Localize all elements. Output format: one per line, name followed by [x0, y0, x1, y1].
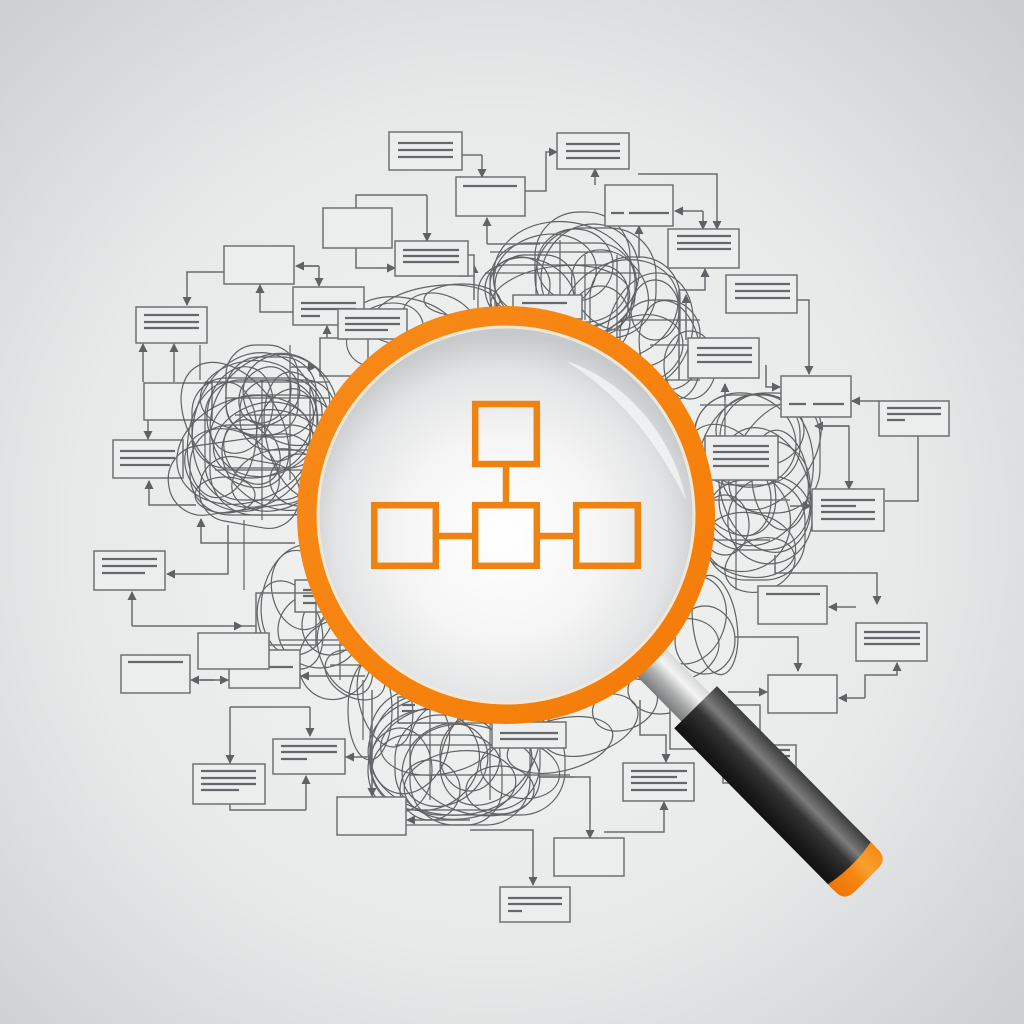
- scribble: bottom cluster: [356, 669, 666, 830]
- handle: black grip: [674, 686, 876, 889]
- flowchart box: empty: [768, 675, 837, 713]
- flowchart box: text: [193, 764, 265, 804]
- flowchart box: text behind, lower left: [295, 580, 345, 612]
- flowchart box: empty: [229, 650, 300, 688]
- scribble: left cluster: [159, 329, 355, 590]
- flowchart box: text: [94, 551, 165, 590]
- flowchart box: partly hidden bottom: [492, 722, 566, 748]
- scribble: lower-left cluster: [245, 537, 422, 760]
- flowchart box: partly hidden: [513, 295, 582, 319]
- flowchart box: text: [293, 287, 364, 325]
- flowchart box: text: [668, 229, 739, 268]
- flowchart box: text: [688, 338, 759, 378]
- flowchart box: text: [338, 309, 407, 339]
- flowchart box: text: [879, 401, 949, 436]
- flowchart box: top right text: [557, 133, 629, 169]
- flowchart box: top left text: [389, 132, 462, 170]
- lens glass: [318, 327, 694, 703]
- scribble: right cluster: [665, 376, 840, 602]
- flowchart box: partly hidden bottom left: [398, 697, 458, 723]
- flowchart box: text: [726, 275, 797, 313]
- flowchart box: text: [395, 241, 468, 276]
- tangled scribble lines: [159, 206, 840, 830]
- handle: metal neck: [632, 643, 711, 723]
- lens ring: [297, 306, 715, 724]
- flowchart box: hidden under handle: [670, 705, 760, 749]
- flowchart box: text: [812, 489, 884, 531]
- flowchart box: small tab: [458, 255, 474, 276]
- scribble: top-left strand: [336, 278, 500, 379]
- orange hierarchy icon: [374, 404, 638, 566]
- flowchart box: empty: [323, 208, 392, 248]
- flowchart box: text: [136, 307, 207, 343]
- flowchart box: empty: [224, 246, 294, 284]
- flowchart box: empty: [554, 838, 624, 876]
- flowchart box: empty: [198, 633, 269, 669]
- flowchart box: dashed: [605, 185, 673, 226]
- flowchart box: text: [500, 887, 570, 922]
- connector arrows: [132, 152, 918, 885]
- flowchart box: text: [623, 763, 694, 801]
- flowchart box: text: [856, 623, 927, 661]
- flowchart box: text: [273, 739, 345, 774]
- lens highlight: [566, 361, 686, 500]
- handle: orange end cap: [828, 842, 888, 901]
- flowchart box: empty behind scribble: [144, 383, 212, 420]
- scribble: lower-right strand: [628, 566, 744, 714]
- flowchart box: partly hidden lower left: [256, 593, 316, 645]
- flowchart box: hidden under handle, lower: [723, 745, 796, 783]
- flowchart box: single line: [456, 177, 525, 216]
- flowchart box: partly hidden left: [320, 338, 368, 376]
- magnifying glass: [297, 306, 888, 901]
- flowchart box: empty: [337, 797, 406, 835]
- flowchart box: single line: [758, 586, 827, 624]
- handle: [625, 636, 888, 901]
- flowchart box: text behind scribble: [113, 440, 183, 478]
- scribble: top cluster: [474, 206, 720, 404]
- flowchart box: text: [705, 436, 778, 480]
- flowchart box: dashed: [781, 376, 851, 417]
- flowchart box: single line: [121, 655, 190, 693]
